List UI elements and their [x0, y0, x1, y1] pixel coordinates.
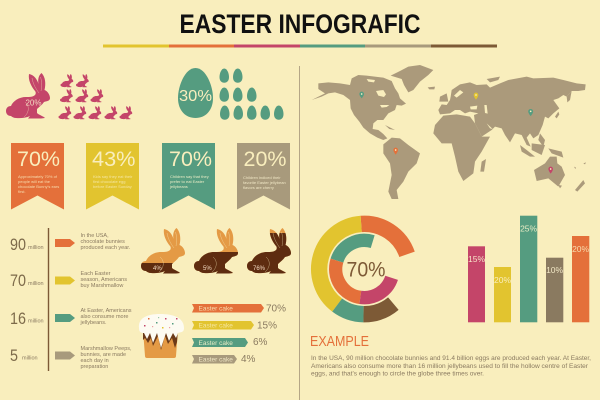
ribbon: 20% cherry flavor: Children indiced their — [243, 175, 281, 180]
ribbon: 70% prefer jellybeans: 70% — [169, 148, 212, 171]
chocolate rabbit 76%: 76% — [253, 266, 266, 272]
bar: 6% — [192, 337, 268, 348]
rabbit pictogram 20% — [6, 73, 132, 119]
stat: 90 million: produced each year. — [80, 245, 131, 251]
stat: 16 million: jellybeans. — [80, 320, 107, 326]
donut chart 70%: 70% — [346, 258, 386, 282]
bar: 70% — [192, 304, 286, 314]
stat: 70 million: season, Americans — [80, 277, 127, 283]
ribbon: 70% chocolate bunny ears: chocolate Bunny's ears — [18, 184, 59, 189]
ribbon: 20% cherry flavor: flavors are cherry — [243, 185, 274, 190]
ribbon: 43% first chocolate egg: 43% — [92, 148, 136, 171]
stat: 70 million: million — [28, 281, 44, 287]
title rule — [103, 44, 497, 48]
chocolate rabbit 4%: 4% — [153, 266, 162, 272]
bar: 15% — [192, 320, 277, 332]
ribbon: 70% chocolate bunny ears: Approximately 70% of — [18, 174, 58, 179]
ribbon: 70% chocolate bunny ears — [11, 143, 64, 210]
stat: 16 million — [10, 308, 132, 328]
bar: 15%: 15% — [257, 320, 277, 332]
world map — [312, 65, 586, 199]
ribbon: 70% prefer jellybeans: Children say that they — [170, 174, 209, 179]
stat: 70 million: Each Easter — [80, 271, 111, 277]
example heading: EXAMPLE — [310, 334, 369, 350]
ribbon: 70% prefer jellybeans: prefer to eat Easter — [170, 179, 205, 184]
ribbon: 43% first chocolate egg — [86, 143, 139, 210]
chocolate rabbit 4% — [141, 228, 185, 274]
stat: 90 million: In the USA, — [80, 233, 109, 239]
egg pictogram 30% — [178, 68, 284, 120]
stat: 5 million: million — [22, 356, 38, 362]
ribbon: 20% cherry flavor — [237, 143, 290, 210]
egg pictogram 30%: 30% — [179, 88, 212, 105]
bar: 6%: Easter cake — [198, 340, 233, 347]
stat: 90 million: 90 — [10, 235, 26, 254]
ribbon: 70% prefer jellybeans — [162, 143, 215, 210]
chocolate rabbit 5% — [194, 228, 238, 274]
title: EASTER INFOGRAFIC — [180, 9, 420, 39]
bar: 4% — [192, 354, 256, 365]
bar: 70%: Easter cake — [198, 306, 233, 312]
icon: easter cake — [139, 314, 184, 358]
ribbon: 43% first chocolate egg: first chocolate egg — [93, 179, 125, 184]
ribbon: 43% first chocolate egg: before Easter Sunday — [93, 184, 132, 189]
bar: 70%: 70% — [266, 304, 286, 314]
chocolate rabbit 5%: 5% — [203, 266, 212, 272]
donut chart 70% — [319, 224, 407, 314]
stat: 90 million: million — [28, 245, 44, 251]
stat: 5 million: 5 — [10, 346, 18, 365]
stat: 16 million: also consume more — [80, 314, 128, 320]
ribbon: 20% cherry flavor: favorite Easter jellybean — [243, 180, 286, 185]
stat: 5 million: bunnies, are made — [80, 352, 126, 358]
bar: 15%: Easter cake — [198, 322, 233, 330]
example paragraph: In the USA, 90 million chocolate bunnies and 91.4 billion eggs are produced each year. At Easter, — [311, 355, 591, 362]
chocolate rabbit 76% — [247, 228, 291, 274]
bar: 4%: Easter cake — [198, 356, 233, 364]
stat: 5 million: each day in — [80, 358, 109, 364]
map pin: yellow europe — [474, 93, 478, 100]
timeline of millions — [10, 228, 132, 371]
stat: 70 million: 70 — [10, 271, 26, 290]
rabbit pictogram 20%: 20% — [25, 98, 42, 108]
example paragraph: Americans also consume more than 16 million jellybeans used to fill the hollow centre of Easter — [311, 363, 588, 370]
stat: 90 million — [10, 233, 131, 254]
ribbon: 70% chocolate bunny ears: people will eat the — [18, 179, 51, 184]
stat: 5 million: Marshmallow Peeps, — [80, 346, 132, 352]
ribbon: 43% first chocolate egg: Kids say they eat their — [93, 174, 133, 179]
bar: 25%: 25% — [520, 224, 538, 234]
ribbon: 70% prefer jellybeans: jellybeans — [169, 184, 188, 189]
bar: 4%: 4% — [241, 354, 256, 365]
map pin: orange south america — [393, 148, 398, 155]
stat: 90 million: chocolate bunnies — [80, 239, 125, 245]
ribbon: 70% chocolate bunny ears: 70% — [17, 148, 60, 171]
stat: 70 million: buy Marshmallow — [80, 283, 123, 289]
bar: 10%: 10% — [546, 265, 564, 275]
ribbon: 70% chocolate bunny ears: first. — [18, 189, 26, 194]
example paragraph: eggs, and that's enough to circle the globe three times over. — [311, 370, 484, 378]
map pin: red australia — [548, 167, 553, 174]
bar chart — [468, 216, 590, 322]
stat: 5 million: preparation — [80, 364, 108, 370]
bar: 20%: 20% — [572, 244, 590, 254]
bar list: easter cake — [192, 304, 286, 365]
ribbon: 20% cherry flavor: 20% — [244, 148, 286, 171]
bar: 20%: 20% — [494, 275, 511, 285]
stat: 16 million: million — [28, 318, 44, 324]
bar: 6%: 6% — [253, 337, 268, 348]
stat: 5 million — [10, 346, 132, 370]
bar: 15%: 15% — [468, 254, 485, 264]
stat: 70 million — [10, 271, 127, 290]
stat: 16 million: 16 — [10, 309, 26, 328]
example paragraph — [311, 355, 591, 378]
map pin: green north america — [359, 92, 364, 98]
map pin: green asia — [528, 109, 533, 116]
stat: 16 million: At Easter, Americans — [80, 308, 132, 314]
